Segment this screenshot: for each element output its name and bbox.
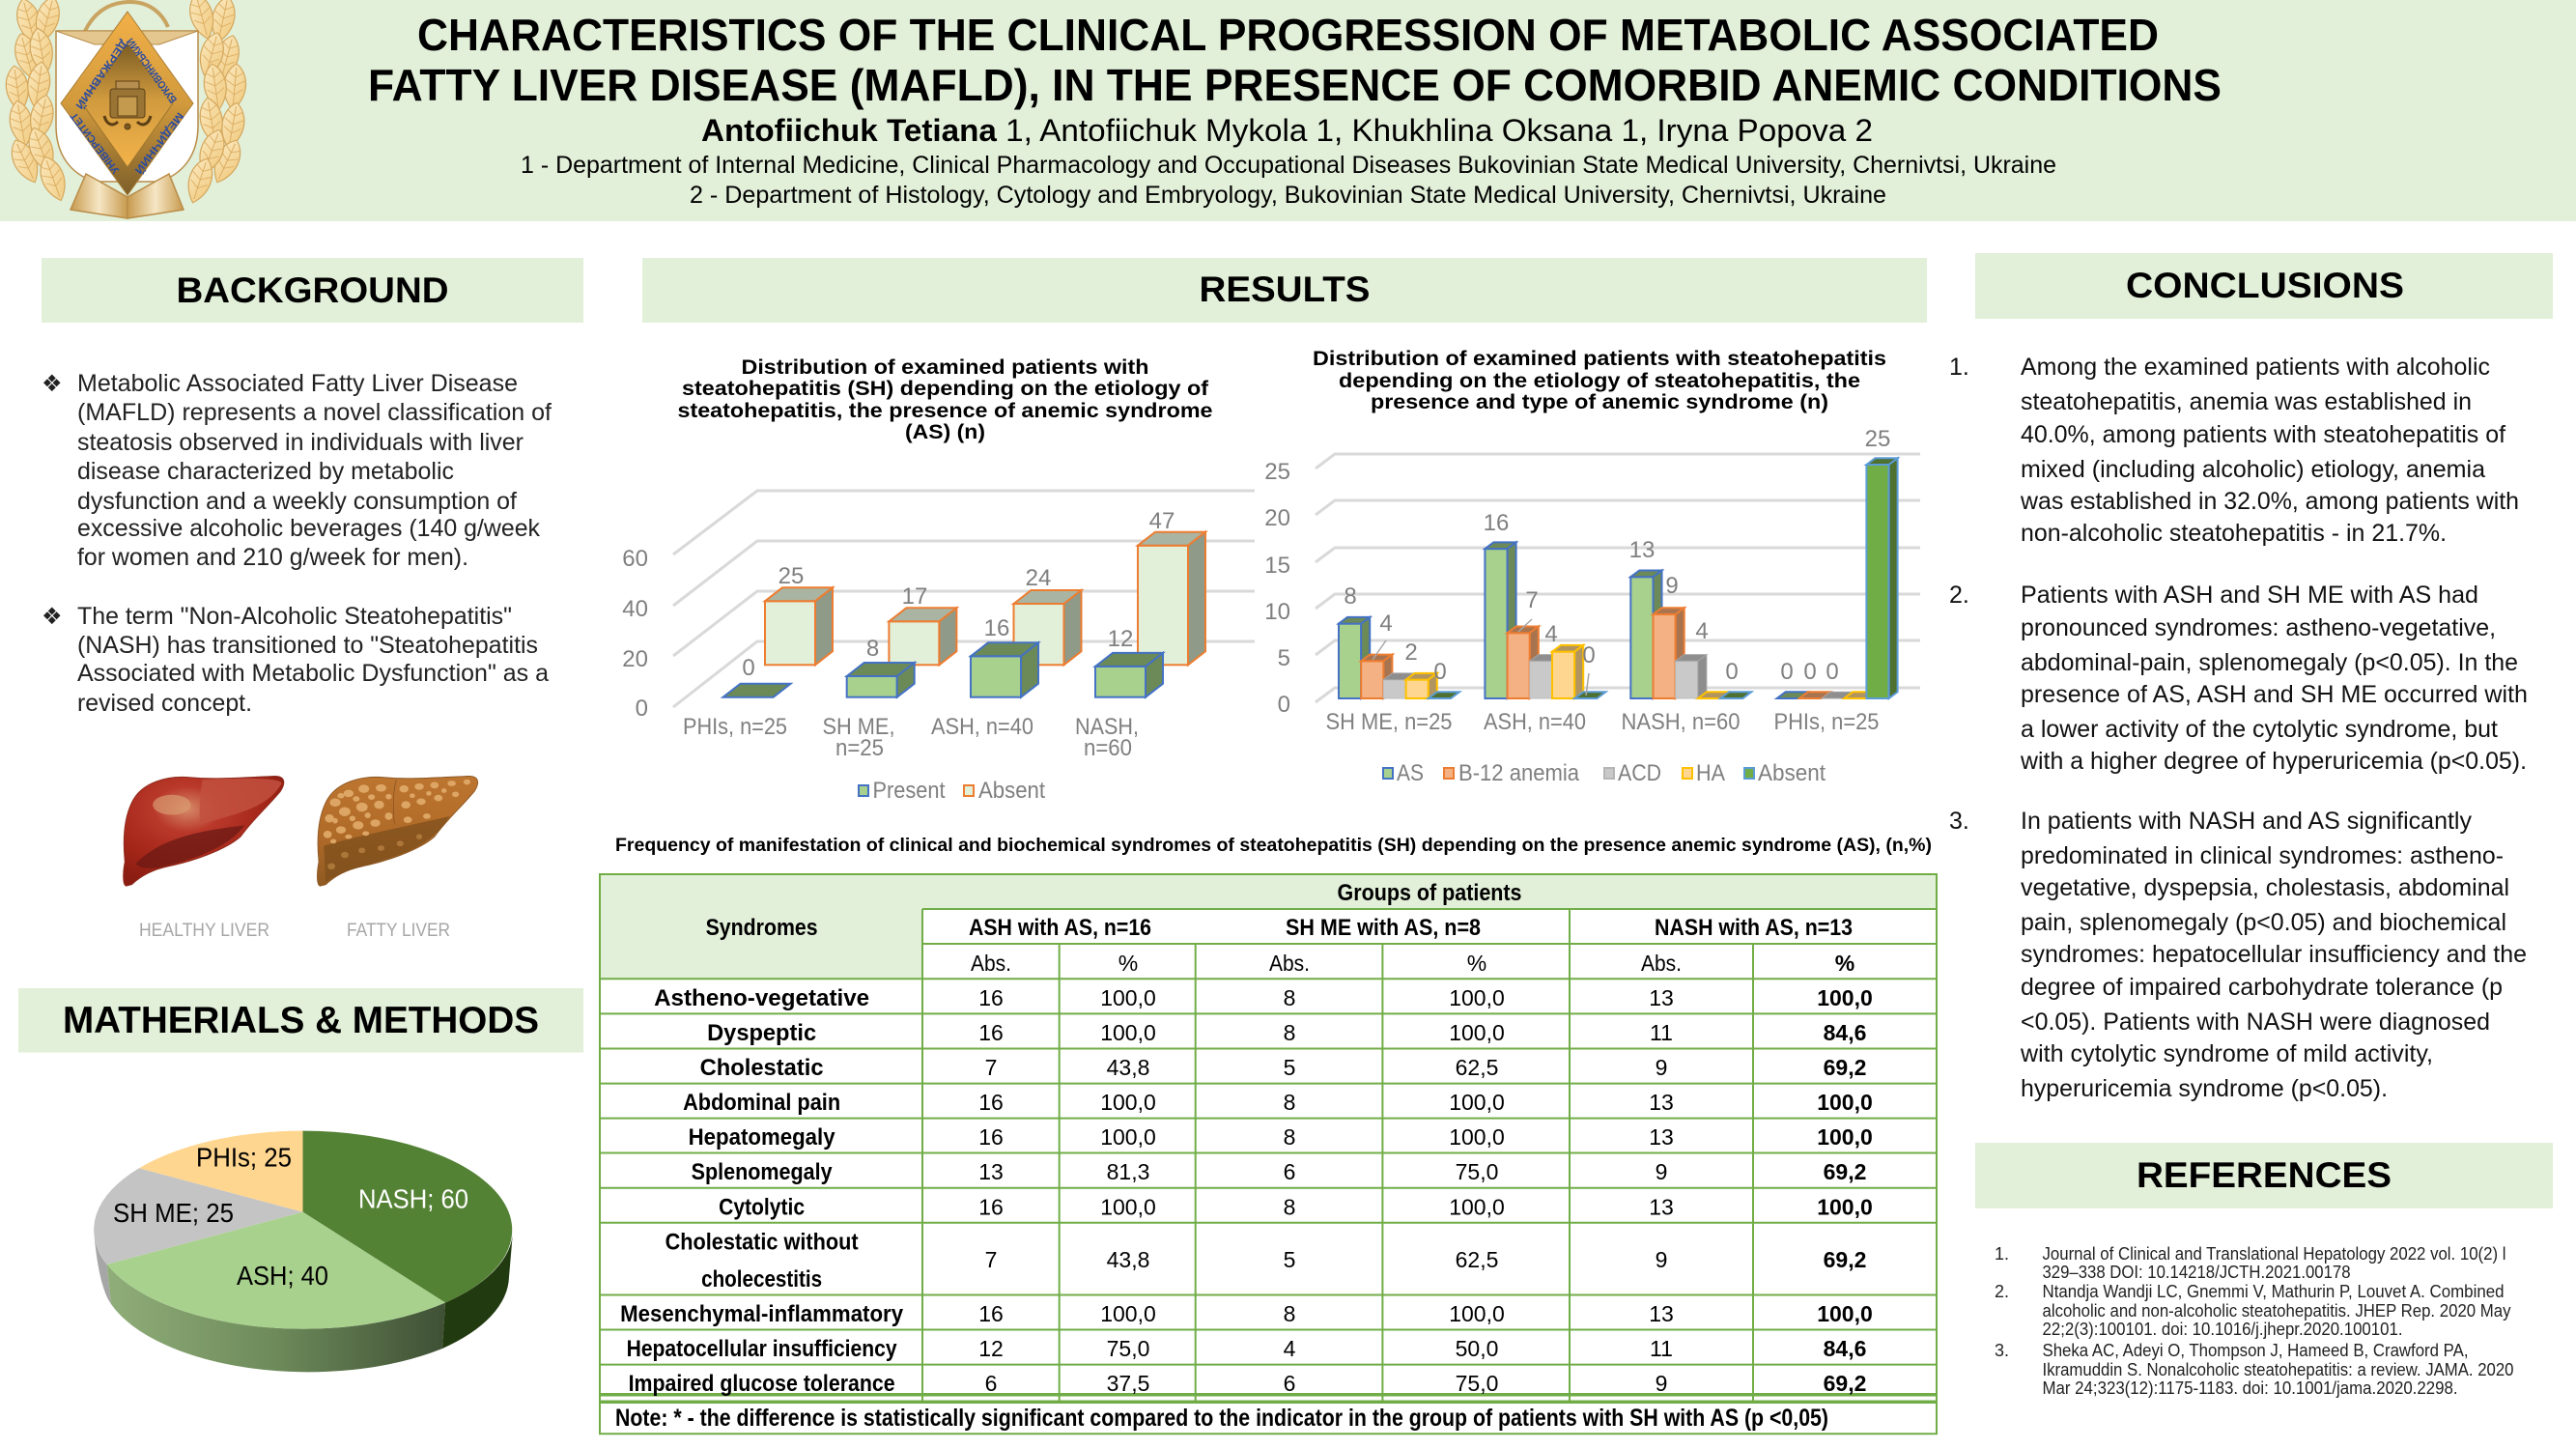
emblem lettering: МЕДИЧНИЙ xyxy=(132,110,186,176)
row: Hepatocellular insufficiency: Hepatocellular insufficiency xyxy=(627,1336,897,1362)
heading: results: RESULTS xyxy=(1200,270,1370,309)
y axis: 40 xyxy=(622,596,648,622)
conclusion 2: presence of AS, ASH and SH ME occurred with xyxy=(2021,681,2528,708)
row: Abdominal pain: 16 xyxy=(978,1090,1004,1115)
row: Hepatomegaly: 100,0 xyxy=(1100,1124,1156,1150)
emblem lettering: УНІВЕРСИТЕТ xyxy=(69,110,122,176)
row: Hepatocellular insufficiency: 75,0 xyxy=(1107,1336,1149,1361)
row: Splenomegaly xyxy=(692,1159,1866,1185)
y axis: 10 xyxy=(1264,599,1290,625)
row: Dyspeptic: 84,6 xyxy=(1824,1020,1866,1045)
row: Impaired glucose tolerance: Impaired glucose tolerance xyxy=(629,1371,895,1397)
bars: NASH group xyxy=(1630,570,1751,698)
conclusion 3: with cytolytic syndrome of mild activity, xyxy=(2020,1040,2433,1067)
chart: patients by etiology and anemic syndrome xyxy=(622,356,1255,804)
heading: materials and methods: MATHERIALS & METHODS xyxy=(63,1000,539,1041)
row: Hepatocellular insufficiency: 12 xyxy=(978,1336,1004,1361)
row: Cholestatic without cholecestitis: 62,5 xyxy=(1456,1247,1498,1272)
row: Cholestatic: 7 xyxy=(985,1055,997,1080)
x axis labels: ASH, n=40 xyxy=(931,714,1033,740)
table headers: % xyxy=(1467,951,1486,976)
legend: Absent xyxy=(978,778,1045,804)
row: Astheno-vegetative: 13 xyxy=(1649,985,1674,1010)
x axis labels: n=25 xyxy=(835,735,884,761)
y axis: 15 xyxy=(1264,553,1290,579)
row: Mesenchymal-inflammatory: 100,0 xyxy=(1100,1301,1156,1326)
row: Cholestatic without cholecestitis: 9 xyxy=(1656,1247,1667,1272)
conclusion 2: with a higher degree of hyperuricemia (p<0.05). xyxy=(2020,748,2527,775)
conclusion 3: hyperuricemia syndrome (p<0.05). xyxy=(2021,1075,2388,1102)
x axis labels: NASH, n=60 xyxy=(1621,709,1741,735)
y axis: 20 xyxy=(622,646,648,672)
row: Hepatocellular insufficiency xyxy=(627,1336,1866,1362)
slice: NASH xyxy=(303,1131,512,1302)
row: Splenomegaly: 6 xyxy=(1284,1159,1295,1184)
data labels: 4 xyxy=(1379,611,1393,637)
row: Impaired glucose tolerance xyxy=(629,1371,1866,1397)
conclusion 1: Among the examined patients with alcoholic xyxy=(2021,354,2490,381)
icon: inner diamond xyxy=(82,43,173,167)
row: Hepatomegaly: 13 xyxy=(1649,1124,1674,1150)
x axis labels: PHIs, n=25 xyxy=(683,714,787,740)
chart title: steatohepatitis, the presence of anemic syndrome xyxy=(678,400,1213,422)
y axis: 0 xyxy=(636,696,648,722)
row: Cholestatic without cholecestitis: 7 xyxy=(985,1247,997,1272)
conclusion 1: was established in 32.0%, among patients with xyxy=(2020,488,2519,515)
row: Cholestatic: 5 xyxy=(1284,1055,1295,1080)
row: Cytolytic xyxy=(719,1194,1873,1221)
row: Cholestatic without cholecestitis: cholecestitis xyxy=(701,1266,822,1293)
conclusion 1: steatohepatitis, anemia was established in xyxy=(2021,388,2472,415)
row: Hepatocellular insufficiency: 11 xyxy=(1650,1336,1673,1361)
caption: healthy liver: HEALTHY LIVER xyxy=(139,921,269,941)
data labels: 0 xyxy=(1582,642,1596,668)
heading: references: REFERENCES xyxy=(2137,1155,2392,1195)
title: FATTY LIVER DISEASE (MAFLD), IN THE PRESENCE OF COMORBID ANEMIC CONDITIONS xyxy=(368,60,2222,110)
icon: bullet 2: ❖ xyxy=(42,603,63,630)
row: Cholestatic: 43,8 xyxy=(1107,1055,1149,1080)
conclusion 3: 3. xyxy=(1949,808,1969,835)
bars: absent xyxy=(765,532,1205,665)
panel: conclusions xyxy=(1949,253,2553,1102)
header fills xyxy=(600,874,1937,979)
row: Splenomegaly: Splenomegaly xyxy=(692,1159,833,1185)
row: Splenomegaly: 75,0 xyxy=(1456,1159,1498,1184)
row: Impaired glucose tolerance: 75,0 xyxy=(1456,1371,1498,1396)
data labels: 7 xyxy=(1525,587,1539,613)
x axis labels: NASH, xyxy=(1075,714,1139,740)
pie side walls xyxy=(94,1230,513,1372)
data labels xyxy=(742,508,1175,681)
authors: Antofiichuk Tetiana 1, Antofiichuk Mykola 1, Khukhlina Oksana 1, Iryna Popova 2 xyxy=(701,113,1873,148)
header band xyxy=(0,0,2576,221)
data labels: 25 xyxy=(1865,426,1890,452)
text block: MAFLD definition xyxy=(77,370,552,571)
label: SH ME: SH ME; 25 xyxy=(113,1198,234,1228)
text block: MAFLD definition: for women and 210 g/week for men). xyxy=(77,544,468,571)
row: Impaired glucose tolerance: 37,5 xyxy=(1107,1371,1149,1396)
text block: MAFLD definition: Metabolic Associated Fatty Liver Disease xyxy=(77,370,518,397)
emblem lettering xyxy=(69,36,186,176)
x axis labels: SH ME, n=25 xyxy=(1325,709,1453,735)
row: Hepatocellular insufficiency: 4 xyxy=(1284,1336,1296,1361)
conclusion 2: pronounced syndromes: astheno-vegetative, xyxy=(2021,614,2496,641)
conclusion 1 xyxy=(1949,354,2519,547)
label: PHIs: PHIs; 25 xyxy=(196,1142,292,1173)
table headers: Syndromes xyxy=(706,915,818,941)
row: Impaired glucose tolerance: 69,2 xyxy=(1824,1371,1866,1396)
row: Astheno-vegetative: 16 xyxy=(978,985,1004,1010)
data labels: 16 xyxy=(1484,510,1509,536)
panel: background xyxy=(42,258,583,941)
conclusion 1: mixed (including alcoholic) etiology, anemia xyxy=(2021,456,2485,483)
conclusion 3: predominated in clinical syndromes: astheno- xyxy=(2021,842,2504,869)
conclusion 3: <0.05). Patients with NASH were diagnosed xyxy=(2021,1009,2490,1036)
row: Abdominal pain: 13 xyxy=(1649,1090,1674,1115)
table: syndromes by patient group xyxy=(600,874,1937,1434)
text block: NASH term xyxy=(77,603,549,717)
y axis: 20 xyxy=(1264,505,1290,531)
row: Cholestatic without cholecestitis xyxy=(665,1229,1866,1293)
legend: B-12 anemia xyxy=(1458,760,1580,786)
row: Cholestatic: 62,5 xyxy=(1456,1055,1498,1080)
chart title: presence and type of anemic syndrome (n) xyxy=(1371,391,1828,413)
row: Mesenchymal-inflammatory: Mesenchymal-inflammatory xyxy=(620,1301,904,1327)
x axis labels xyxy=(1325,709,1880,735)
icon: snake arc xyxy=(85,2,168,31)
chart title: Distribution of examined patients with xyxy=(742,356,1149,379)
row: Hepatomegaly: 100,0 xyxy=(1449,1124,1505,1150)
x axis labels xyxy=(683,714,1139,761)
bars: SH ME group xyxy=(1339,617,1459,698)
legend xyxy=(859,778,1045,804)
reference 1: 1. xyxy=(1995,1244,2009,1264)
label: NASH: NASH; 60 xyxy=(358,1184,468,1213)
text block: MAFLD definition: dysfunction and a weekly consumption of xyxy=(77,488,517,515)
y axis: 0 xyxy=(1278,692,1290,718)
data labels: 2 xyxy=(1404,639,1418,666)
row: Cholestatic: 69,2 xyxy=(1824,1055,1866,1080)
row: Mesenchymal-inflammatory: 13 xyxy=(1649,1301,1674,1326)
y axis: 25 xyxy=(1264,459,1290,485)
row: Cholestatic without cholecestitis: 43,8 xyxy=(1107,1247,1149,1272)
conclusion 3: In patients with NASH and AS significantly xyxy=(2021,808,2472,835)
row: Dyspeptic: 11 xyxy=(1650,1020,1673,1045)
affiliations: 2 - Department of Histology, Cytology and Embryology, Bukovinian State Medical University, Chernivtsi, Ukraine xyxy=(690,182,1886,209)
row: Astheno-vegetative: 100,0 xyxy=(1817,985,1873,1010)
slice: ASH xyxy=(107,1212,445,1329)
row: Mesenchymal-inflammatory: 100,0 xyxy=(1817,1301,1873,1326)
row: Cholestatic: Cholestatic xyxy=(700,1055,824,1081)
heading: background xyxy=(42,258,583,323)
table headers: Abs. xyxy=(971,951,1011,976)
row: Splenomegaly: 13 xyxy=(978,1159,1004,1184)
data labels: 0 xyxy=(1780,659,1794,685)
table headers: Abs. xyxy=(1641,951,1682,976)
pie chart xyxy=(94,1131,513,1372)
conclusion 2: Patients with ASH and SH ME with AS had xyxy=(2021,582,2478,609)
row: Astheno-vegetative xyxy=(654,985,1873,1011)
panel: materials and methods xyxy=(18,988,583,1372)
data labels: 4 xyxy=(1695,618,1709,644)
row: Abdominal pain: 8 xyxy=(1284,1090,1295,1115)
row: Cytolytic: 100,0 xyxy=(1449,1194,1505,1219)
icon: diamond emblem xyxy=(61,12,193,195)
row: Impaired glucose tolerance: 6 xyxy=(985,1371,997,1396)
panel: references xyxy=(1975,1143,2553,1398)
panel: results xyxy=(600,258,1937,1434)
text block: NASH term: revised concept. xyxy=(77,690,252,717)
row: Cytolytic: 16 xyxy=(978,1194,1004,1219)
title: CHARACTERISTICS OF THE CLINICAL PROGRESSION OF METABOLIC ASSOCIATED xyxy=(417,10,2159,60)
data labels: 16 xyxy=(984,615,1009,641)
conclusion 1: non-alcoholic steatohepatitis - in 21.7%. xyxy=(2021,520,2447,547)
data labels: 47 xyxy=(1149,508,1175,534)
conclusion 3 xyxy=(1949,808,2527,1102)
row: Mesenchymal-inflammatory: 16 xyxy=(978,1301,1004,1326)
reference 3 xyxy=(1995,1341,2513,1398)
row: Abdominal pain: 100,0 xyxy=(1817,1090,1873,1115)
data labels: 0 xyxy=(1803,659,1817,685)
row: Astheno-vegetative: 100,0 xyxy=(1449,985,1505,1010)
conclusion 3: vegetative, dyspepsia, cholestasis, abdominal xyxy=(2021,874,2509,901)
row: Hepatomegaly: 100,0 xyxy=(1817,1124,1873,1150)
icon: shield xyxy=(56,31,198,182)
reference 2: alcoholic and non-alcoholic steatohepatitis. JHEP Rep. 2020 May xyxy=(2042,1301,2511,1321)
y axis xyxy=(622,546,648,722)
x axis labels: SH ME, xyxy=(823,714,894,740)
title xyxy=(368,10,2222,110)
data labels: 4 xyxy=(1544,621,1558,647)
heading: references xyxy=(1975,1143,2553,1208)
text block: MAFLD definition: (MAFLD) represents a novel classification of xyxy=(77,399,552,426)
row: Splenomegaly: 81,3 xyxy=(1107,1159,1149,1184)
conclusion 3: syndromes: hepatocellular insufficiency and the xyxy=(2021,941,2527,968)
heading: background: BACKGROUND xyxy=(176,270,448,310)
data labels: 9 xyxy=(1665,573,1679,599)
y axis xyxy=(1264,459,1290,718)
bars: PHIs group xyxy=(1777,458,1898,698)
heading: conclusions xyxy=(1975,253,2553,319)
y axis: 5 xyxy=(1278,645,1290,671)
row: Hepatocellular insufficiency: 84,6 xyxy=(1824,1336,1866,1361)
reference 3: Ikramuddin S. Nonalcoholic steatohepatitis: a review. JAMA. 2020 xyxy=(2042,1360,2513,1379)
row: Mesenchymal-inflammatory: 8 xyxy=(1284,1301,1295,1326)
emblem lettering: ДЕРЖАВНИЙ xyxy=(72,38,129,111)
bars: present xyxy=(723,642,1163,697)
legend: ACD xyxy=(1618,760,1661,786)
row: Cholestatic without cholecestitis: 69,2 xyxy=(1824,1247,1866,1272)
conclusion 1: 1. xyxy=(1949,354,1969,381)
row: Dyspeptic: 8 xyxy=(1284,1020,1295,1045)
legend: HA xyxy=(1696,760,1725,786)
text block: MAFLD definition: steatosis observed in individuals with liver xyxy=(77,429,524,456)
row: Cholestatic xyxy=(700,1055,1866,1081)
icon: laurel wreath xyxy=(4,0,247,206)
table headers: NASH with AS, n=13 xyxy=(1655,915,1853,941)
reference 3: Mar 24;323(12):1175-1183. doi: 10.1001/jama.2020.2298. xyxy=(2042,1378,2457,1398)
chart: patients by etiology and type of anemia xyxy=(1264,348,1920,786)
caption: fatty liver: FATTY LIVER xyxy=(347,921,450,941)
row: Cholestatic without cholecestitis: 5 xyxy=(1284,1247,1295,1272)
row: Astheno-vegetative: 100,0 xyxy=(1100,985,1156,1010)
icon: open book xyxy=(71,174,184,218)
row: Dyspeptic xyxy=(707,1020,1866,1046)
table headers: % xyxy=(1118,951,1138,976)
chart title xyxy=(678,356,1213,443)
icon: fatty liver xyxy=(317,776,478,886)
label: ASH: ASH; 40 xyxy=(237,1261,328,1291)
data labels: 0 xyxy=(742,655,755,681)
row: Cytolytic: 8 xyxy=(1284,1194,1295,1219)
reference 3: Sheka AC, Adeyi O, Thompson J, Hameed B, Crawford PA, xyxy=(2042,1341,2469,1360)
table headers: % xyxy=(1835,951,1854,976)
row: Mesenchymal-inflammatory: 100,0 xyxy=(1449,1301,1505,1326)
slice: PHIs xyxy=(139,1131,303,1212)
icon: bullet 1: ❖ xyxy=(42,370,63,397)
conclusion 3: degree of impaired carbohydrate tolerance (p xyxy=(2021,974,2503,1001)
chart title: (AS) (n) xyxy=(905,421,985,443)
row: Cholestatic without cholecestitis: Cholestatic without xyxy=(665,1229,859,1256)
row: Cytolytic: 100,0 xyxy=(1100,1194,1156,1219)
heading: results xyxy=(642,258,1927,323)
row: Astheno-vegetative: Astheno-vegetative xyxy=(654,985,869,1011)
row: Cytolytic: 13 xyxy=(1649,1194,1674,1219)
text block: NASH term: The term "Non-Alcoholic Steatohepatitis" xyxy=(77,603,512,630)
data labels: 8 xyxy=(1344,583,1357,610)
table headers: ASH with AS, n=16 xyxy=(969,915,1151,941)
icon: shield top band xyxy=(56,31,198,44)
conclusion 2: a lower activity of the cytolytic syndrome, but xyxy=(2021,716,2498,743)
x axis labels: ASH, n=40 xyxy=(1484,709,1586,735)
data labels: 24 xyxy=(1026,565,1051,591)
row: Impaired glucose tolerance: 9 xyxy=(1656,1371,1667,1396)
text block: MAFLD definition: disease characterized by metabolic xyxy=(77,458,454,485)
row: Hepatocellular insufficiency: 50,0 xyxy=(1456,1336,1498,1361)
row: Hepatomegaly: 8 xyxy=(1284,1124,1295,1150)
text block: NASH term: (NASH) has transitioned to "Steatohepatitis xyxy=(77,632,538,659)
reference 1: 329–338 DOI: 10.14218/JCTH.2021.00178 xyxy=(2042,1263,2351,1282)
reference 1 xyxy=(1995,1244,2505,1282)
chart title: steatohepatitis (SH) depending on the etiology of xyxy=(682,378,1209,400)
legend: AS xyxy=(1397,760,1424,786)
table headers xyxy=(706,880,1854,976)
row: Abdominal pain: 100,0 xyxy=(1449,1090,1505,1115)
slice: SH ME xyxy=(94,1168,303,1264)
table caption: Frequency of manifestation of clinical and biochemical syndromes of steatohepatitis (SH) depending on the presence anemic syndrome (AS), (n,%) xyxy=(615,836,1932,856)
row: Cytolytic: Cytolytic xyxy=(719,1194,805,1221)
data labels: 13 xyxy=(1629,537,1655,563)
text block: MAFLD definition: excessive alcoholic beverages (140 g/week xyxy=(77,515,540,542)
chart title xyxy=(1313,348,1886,413)
y axis: 60 xyxy=(622,546,648,572)
icon: healthy liver xyxy=(124,776,284,886)
data labels: 0 xyxy=(1826,659,1839,685)
x axis labels: PHIs, n=25 xyxy=(1773,709,1880,735)
legend xyxy=(1383,760,1826,786)
legend: Absent xyxy=(1758,760,1826,786)
reference 2: Ntandja Wandji LC, Gnemmi V, Mathurin P, Louvet A. Combined xyxy=(2042,1282,2504,1301)
row: Splenomegaly: 9 xyxy=(1656,1159,1667,1184)
data labels: 0 xyxy=(1725,659,1739,685)
row: Hepatomegaly: 16 xyxy=(978,1124,1004,1150)
row: Dyspeptic: Dyspeptic xyxy=(707,1020,816,1046)
university logo xyxy=(4,0,247,218)
affiliations xyxy=(521,152,2056,209)
row: Abdominal pain: Abdominal pain xyxy=(683,1090,840,1116)
text block: NASH term: Associated with Metabolic Dysfunction" as a xyxy=(77,660,549,687)
row: Mesenchymal-inflammatory xyxy=(620,1301,1873,1327)
reference 2: 2. xyxy=(1995,1282,2009,1301)
data labels: 8 xyxy=(866,636,879,662)
data labels: 17 xyxy=(902,583,927,610)
data labels: 0 xyxy=(1433,659,1447,685)
affiliations: 1 - Department of Internal Medicine, Clinical Pharmacology and Occupational Diseases Bukovinian State Medical University, Chernivtsi, Ukraine xyxy=(521,152,2056,179)
conclusion 1: 40.0%, among patients with steatohepatitis of xyxy=(2021,421,2505,448)
conclusion 2: 2. xyxy=(1949,582,1969,609)
table headers: SH ME with AS, n=8 xyxy=(1286,915,1481,941)
data labels: 12 xyxy=(1108,626,1133,652)
conclusion 2 xyxy=(1949,582,2528,775)
conclusion 3: pain, splenomegaly (p<0.05) and biochemical xyxy=(2021,909,2506,936)
reference 1: Journal of Clinical and Translational Hepatology 2022 vol. 10(2) l xyxy=(2042,1244,2505,1264)
heading: materials and methods xyxy=(18,988,583,1053)
conclusion 2: abdominal-pain, splenomegaly (p<0.05). In the xyxy=(2021,649,2518,676)
row: Dyspeptic: 16 xyxy=(978,1020,1004,1045)
bars: ASH group xyxy=(1485,542,1605,698)
row: Impaired glucose tolerance: 6 xyxy=(1284,1371,1295,1396)
reference 3: 3. xyxy=(1995,1341,2009,1360)
row: Splenomegaly: 69,2 xyxy=(1824,1159,1866,1184)
table headers: Groups of patients xyxy=(1337,880,1522,906)
row: Abdominal pain: 100,0 xyxy=(1100,1090,1156,1115)
row: Hepatomegaly xyxy=(689,1124,1873,1151)
row: Cytolytic: 100,0 xyxy=(1817,1194,1873,1219)
data labels xyxy=(1344,426,1890,685)
row: Astheno-vegetative: 8 xyxy=(1284,985,1295,1010)
row: Dyspeptic: 100,0 xyxy=(1449,1020,1505,1045)
row: Hepatomegaly: Hepatomegaly xyxy=(689,1124,835,1151)
row: Dyspeptic: 100,0 xyxy=(1100,1020,1156,1045)
row: Abdominal pain xyxy=(683,1090,1873,1116)
table note: Note: * - the difference is statistically significant compared to the indicator in the group of patients with SH with AS (p <0,05) xyxy=(615,1405,1828,1432)
x axis labels: n=60 xyxy=(1084,735,1132,761)
chart title: Distribution of examined patients with steatohepatitis xyxy=(1313,348,1886,370)
data labels: 25 xyxy=(778,563,804,589)
reference 2 xyxy=(1995,1282,2511,1339)
reference 2: 22;2(3):100101. doi: 10.1016/j.jhepr.2020.100101. xyxy=(2042,1320,2403,1339)
emblem lettering: БУКОВИНСЬКИЙ xyxy=(124,36,180,105)
icon: crest xyxy=(104,81,151,129)
heading: conclusions: CONCLUSIONS xyxy=(2126,266,2404,305)
table headers: Abs. xyxy=(1269,951,1310,976)
chart title: depending on the etiology of steatohepatitis, the xyxy=(1339,370,1860,392)
legend: Present xyxy=(873,778,946,804)
row: Cholestatic: 9 xyxy=(1656,1055,1667,1080)
